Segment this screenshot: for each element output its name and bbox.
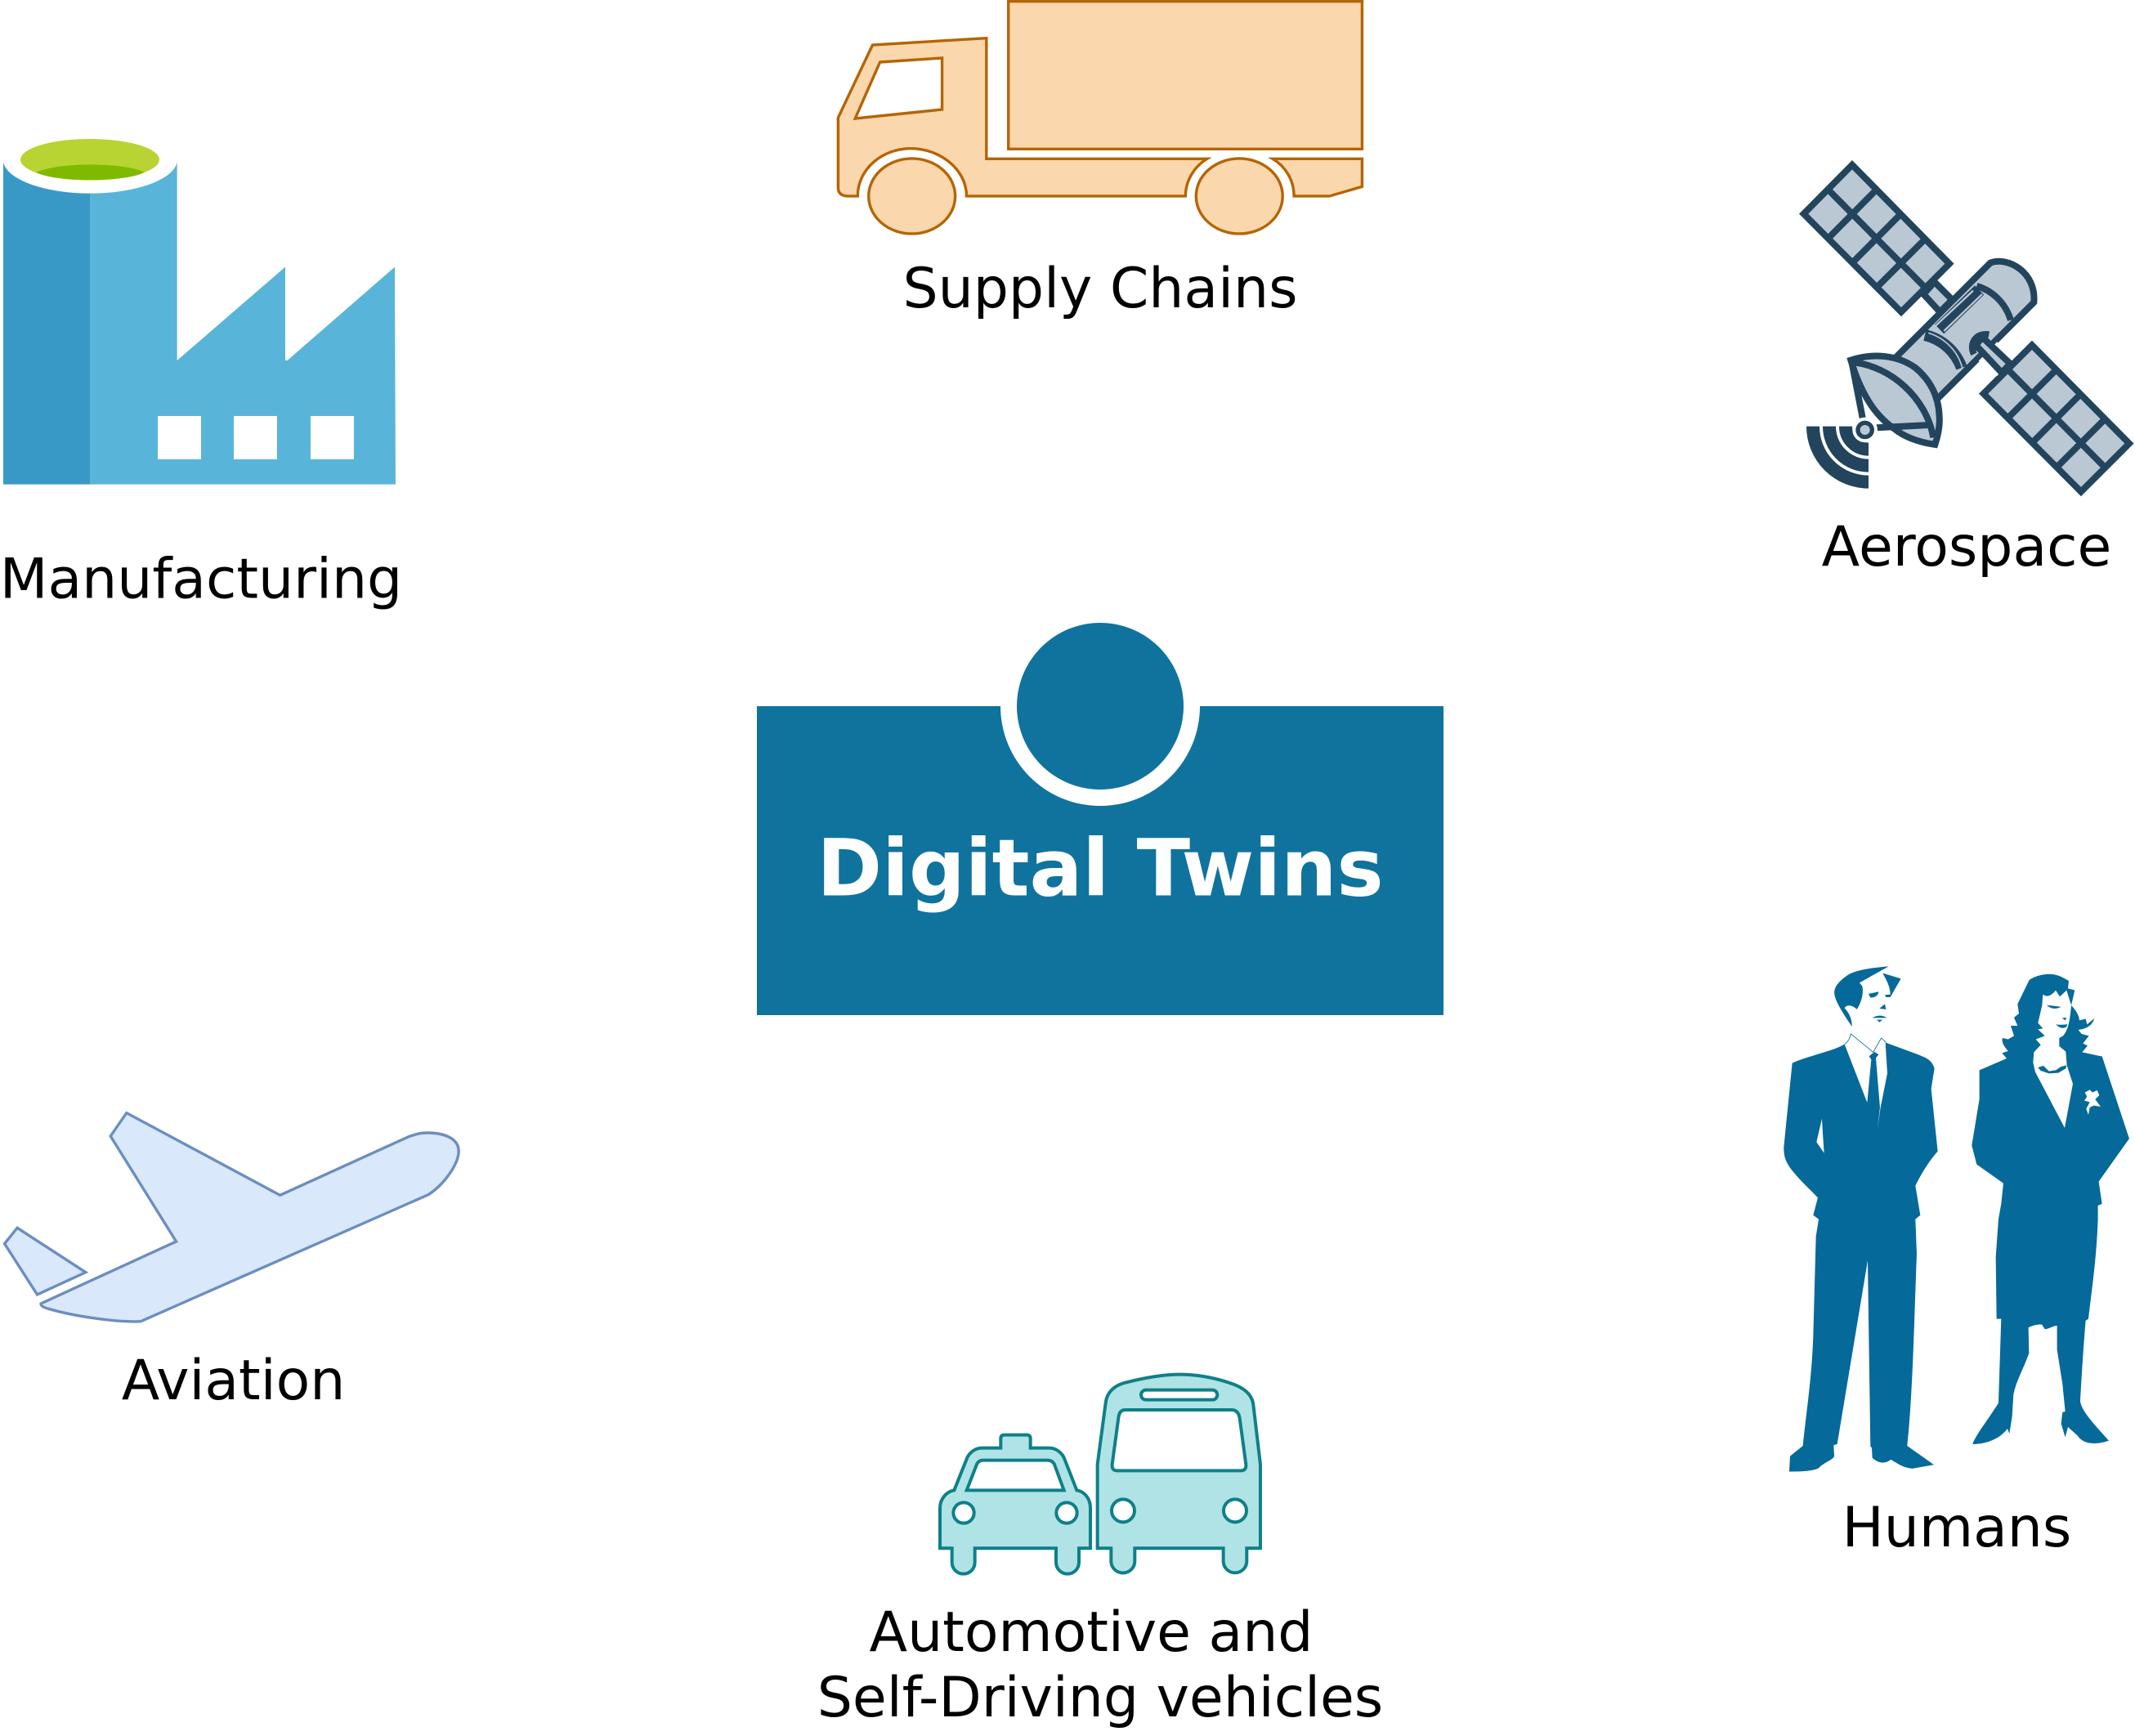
woman silhouette (1972, 974, 2129, 1444)
label: Supply Chains: Supply Chains (902, 257, 1298, 321)
label: Automotive and Self-Driving vehicles: Automotive and (870, 1600, 1313, 1665)
icon: satellite (1804, 165, 2129, 492)
icon: man and woman silhouettes (1784, 966, 2129, 1471)
icon: airplane (5, 1113, 459, 1322)
label: Manufacturing: Manufacturing (0, 548, 402, 611)
icon: truck (838, 2, 1362, 234)
label: Aerospace: Aerospace (1822, 515, 2111, 579)
label: Automotive and Self-Driving vehicles (817, 1600, 1383, 1730)
label: Aviation: Aviation (122, 1349, 345, 1413)
man silhouette (1784, 966, 1938, 1471)
title: Digital Twins (817, 822, 1384, 914)
central panel: Digital Twins (757, 606, 1443, 1015)
label: Automotive and Self-Driving vehicles: Self-Driving vehicles (817, 1666, 1383, 1730)
icon: factory (3, 125, 396, 485)
icon: car and bus (940, 1375, 1260, 1574)
label: Humans: Humans (1842, 1496, 2071, 1560)
